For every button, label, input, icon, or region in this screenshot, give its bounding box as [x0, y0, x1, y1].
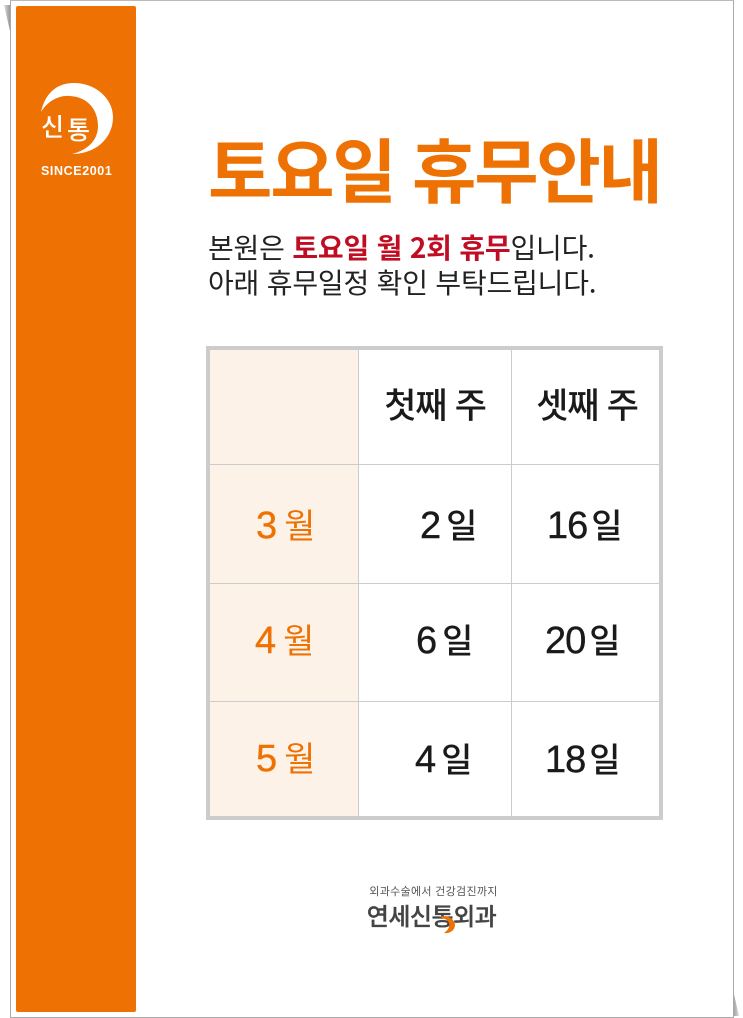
intro text [208, 227, 596, 302]
panel: orange sidebar [16, 6, 136, 1012]
intro text: 아래 휴무일정 확인 부탁드립니다. [208, 262, 596, 302]
logo tagline: SINCE2001 [41, 164, 112, 178]
icon: crescent logo [41, 83, 113, 154]
logo wordmark: 신 [41, 108, 64, 144]
row label: April: 4월 [255, 614, 314, 663]
corner shadow: top left [4, 5, 10, 31]
hospital name: 연세신통외과 [367, 897, 496, 932]
table outer border [206, 346, 663, 820]
corner shadow: bottom right [734, 994, 739, 1016]
grid lines [358, 350, 359, 816]
logo wordmark: 통 [67, 111, 90, 147]
intro text: 본원은 토요일 월 2회 휴무입니다. [208, 227, 595, 267]
column heading: third week: 셋째 주 [536, 378, 638, 429]
footer logo [367, 883, 498, 934]
row label: May: 5월 [256, 732, 315, 781]
March first week: 2일 [420, 499, 477, 548]
April third week: 20일 [545, 614, 621, 663]
May third week: 18일 [545, 733, 621, 782]
footer slogan: 외과수술에서 건강검진까지 [369, 883, 498, 899]
month column background [206, 346, 358, 820]
April first week: 6일 [416, 614, 473, 663]
row label: March: 3월 [256, 499, 315, 548]
March third week: 16일 [547, 499, 623, 548]
title: 토요일 휴무안내 [208, 117, 661, 218]
icon: small orange crescent [439, 916, 455, 934]
panel: schedule table [206, 346, 663, 820]
column heading: first week: 첫째 주 [384, 378, 486, 429]
May first week: 4일 [415, 733, 472, 782]
